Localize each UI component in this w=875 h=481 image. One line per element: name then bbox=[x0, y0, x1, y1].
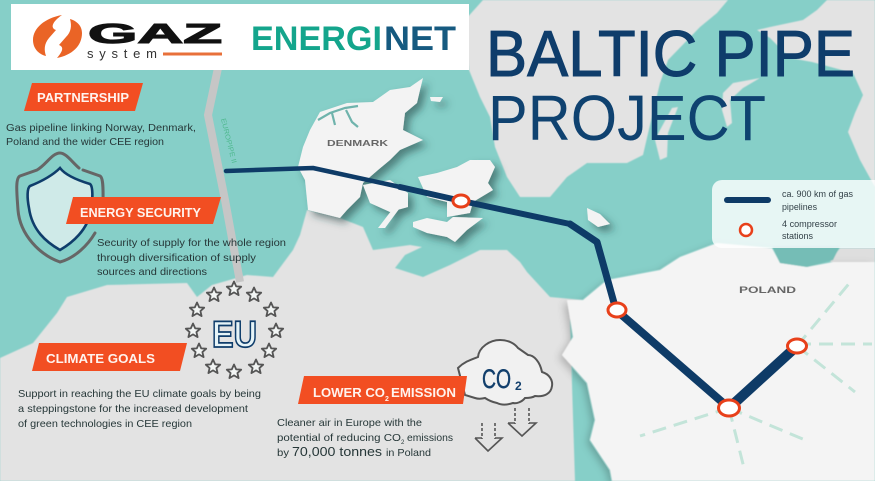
land: Poland bbox=[562, 243, 875, 481]
baltic pipe route bbox=[226, 168, 797, 408]
panel: energy security: ENERGY SECURITY bbox=[80, 205, 201, 220]
panel: partnership: Poland and the wider CEE region bbox=[6, 136, 164, 148]
panel: energy security: sources and directions bbox=[97, 266, 207, 278]
land: Denmark bbox=[298, 78, 610, 242]
title: BALTIC PIPE bbox=[486, 17, 855, 90]
sea inlet: Limfjord bbox=[318, 106, 358, 127]
panel: partnership: Gas pipeline linking Norway, Denmark, bbox=[6, 122, 196, 134]
sea: lagoon under legend bbox=[772, 246, 840, 267]
logo: Gaz-System bbox=[33, 15, 222, 61]
country label: Poland: POLAND bbox=[739, 285, 797, 295]
legend: stations bbox=[782, 231, 813, 241]
logo: Energinet: NET bbox=[384, 20, 456, 58]
legend: ca. 900 km of gas bbox=[782, 189, 853, 199]
icon: downward arrows bbox=[475, 408, 536, 451]
panel: lower CO2 emission: emissions bbox=[407, 432, 453, 444]
country label: Denmark: DENMARK bbox=[327, 138, 389, 148]
land: Baltic islands bbox=[640, 12, 760, 160]
panel: lower CO2 emission: EMISSION bbox=[391, 385, 456, 400]
legend: 4 compressor bbox=[782, 219, 837, 229]
legend bbox=[712, 180, 875, 248]
logo: Energinet: ENERGI bbox=[251, 20, 382, 58]
logo: Gaz-System: system bbox=[87, 46, 157, 61]
icon: shield bbox=[17, 153, 103, 262]
panel: lower CO2 emission: 70,000 tonnes bbox=[292, 444, 383, 459]
logo banner bbox=[11, 4, 469, 70]
gas pipeline Europipe II bbox=[208, 68, 240, 282]
land: eastern coast strip bbox=[830, 248, 875, 262]
title: PROJECT bbox=[488, 82, 766, 154]
panel: lower CO2 emission: potential of reducing CO bbox=[277, 432, 401, 444]
icon: CO2 cloud bbox=[458, 340, 552, 404]
land: Germany and western Europe bbox=[0, 210, 583, 481]
panel: lower CO2 emission bbox=[277, 376, 467, 459]
label: Europipe II: EUROPIPE II bbox=[219, 118, 237, 164]
panel: climate goals: of green technologies in CEE region bbox=[18, 418, 192, 430]
panel: energy security bbox=[66, 197, 286, 278]
logo: Gaz-System: GAZ bbox=[88, 18, 222, 49]
icon: CO2 cloud: CO bbox=[482, 364, 511, 394]
panel: partnership bbox=[6, 83, 196, 148]
compressor stations bbox=[453, 195, 806, 416]
panel: energy security: Security of supply for the whole region bbox=[97, 237, 286, 249]
title bbox=[486, 17, 855, 154]
panel: lower CO2 emission: in Poland bbox=[386, 447, 431, 459]
dashed gas connections bbox=[640, 280, 872, 472]
panel: lower CO2 emission: LOWER CO bbox=[313, 385, 385, 400]
panel: climate goals: CLIMATE GOALS bbox=[46, 351, 155, 366]
panel: partnership: PARTNERSHIP bbox=[37, 90, 129, 105]
panel: climate goals: a steppingstone for the increased development bbox=[18, 403, 248, 415]
panel: lower CO2 emission: by bbox=[277, 447, 290, 459]
land: Sweden and Norway bbox=[245, 0, 728, 197]
panel: energy security: through diversification of supply bbox=[97, 252, 257, 264]
icon: CO2 cloud: 2 bbox=[515, 379, 522, 393]
panel: lower CO2 emission: 2 bbox=[401, 440, 405, 446]
icon: EU stars bbox=[186, 282, 283, 378]
panel: lower CO2 emission: Cleaner air in Europe with the bbox=[277, 417, 422, 429]
legend: pipelines bbox=[782, 202, 817, 212]
panel: climate goals bbox=[18, 343, 261, 430]
land: Finland and Baltic states bbox=[757, 0, 875, 187]
panel: climate goals: Support in reaching the EU climate goals by being bbox=[18, 388, 261, 400]
icon: EU stars: EU bbox=[212, 314, 257, 355]
panel: lower CO2 emission: 2 bbox=[385, 396, 389, 403]
logo: Energinet bbox=[251, 20, 456, 58]
